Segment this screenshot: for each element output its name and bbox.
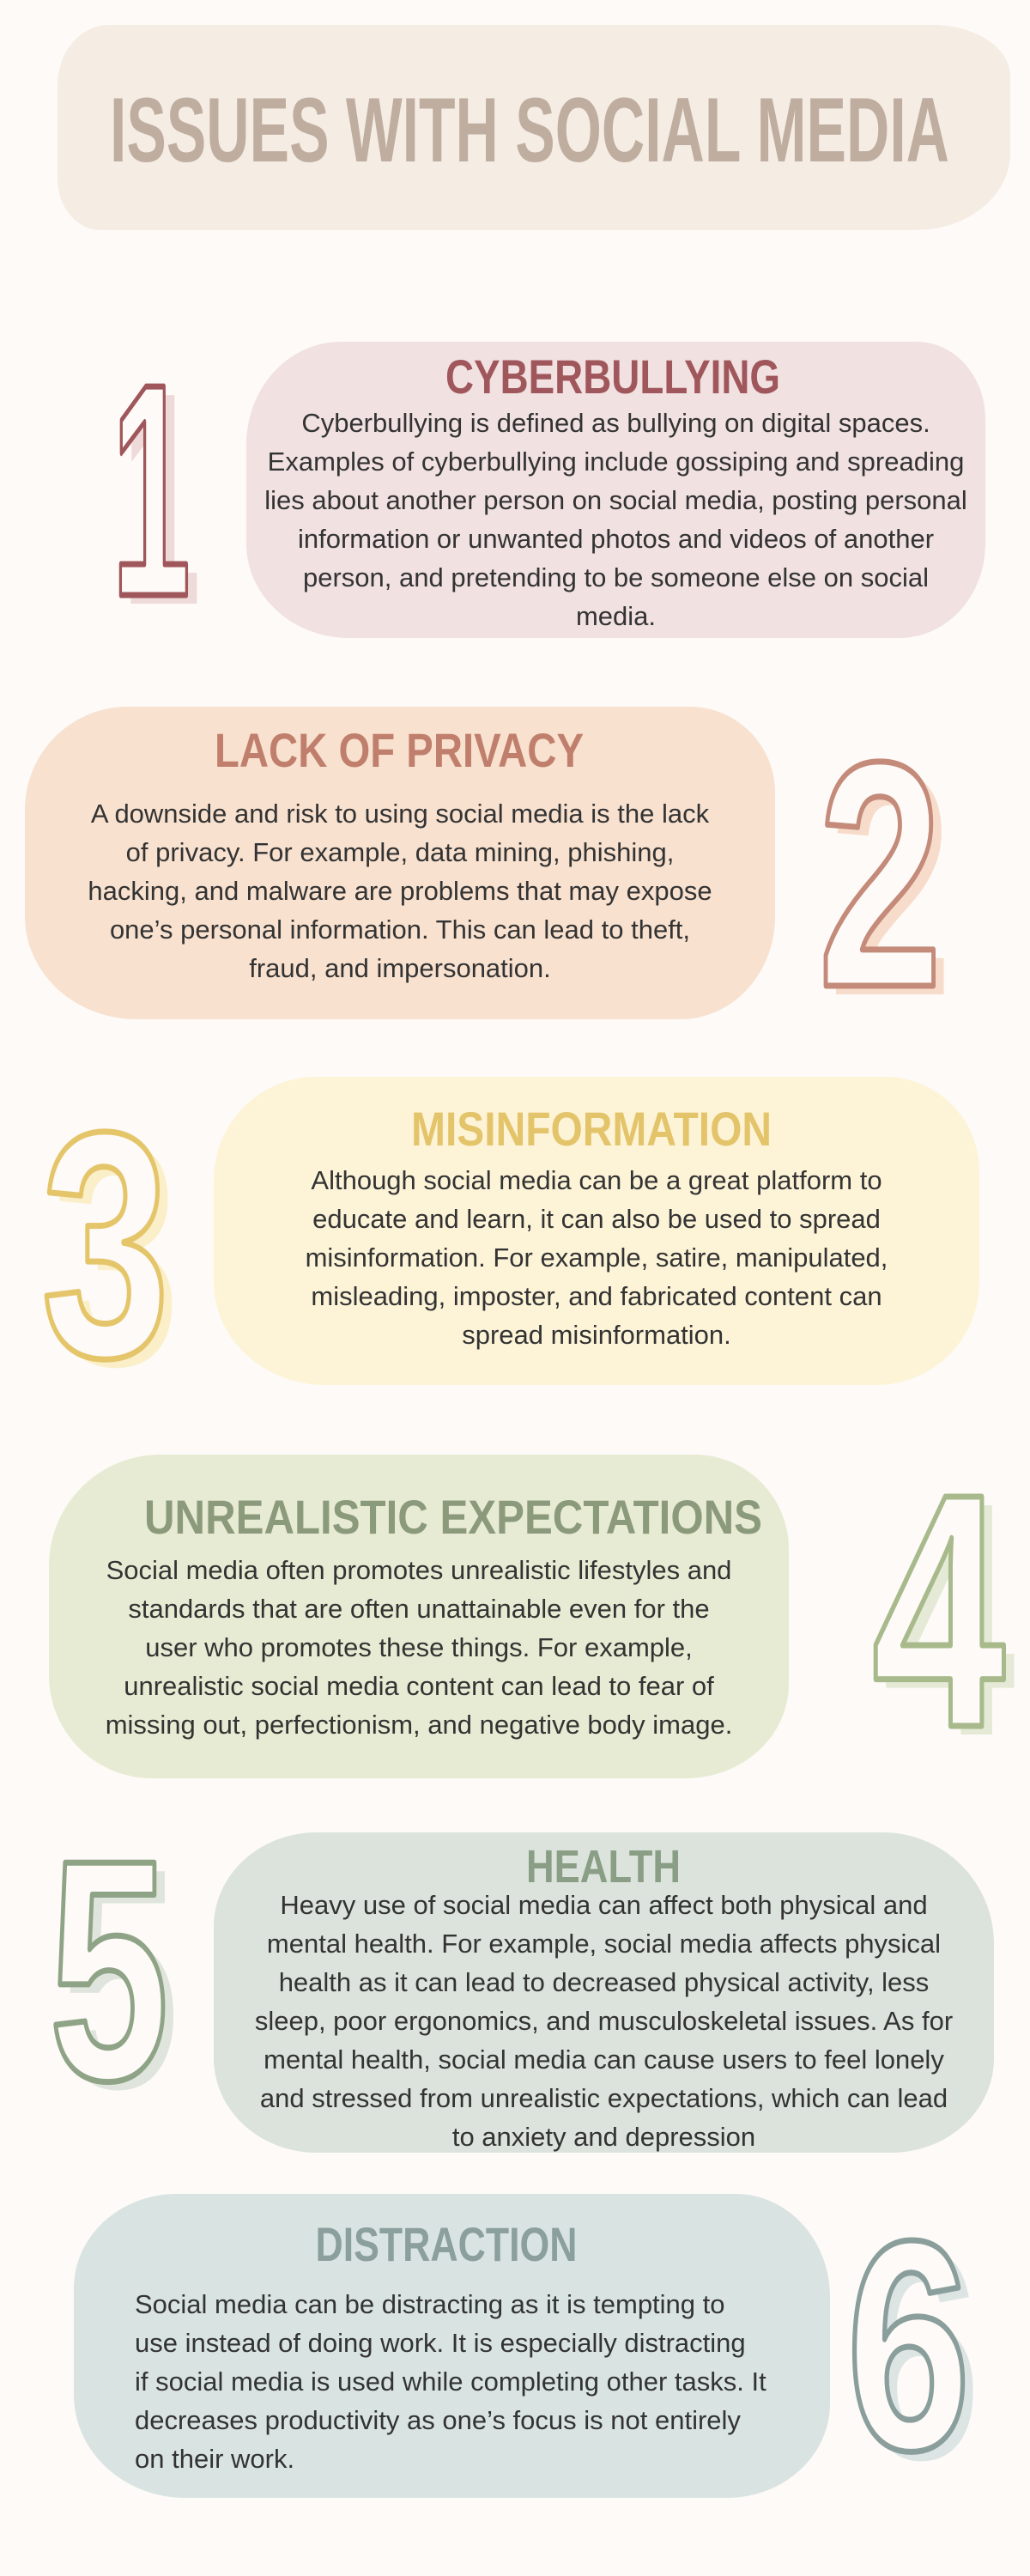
heading: health: HEALTH <box>526 1841 681 1893</box>
text: distraction: use instead of doing work. It is especially distracting <box>135 2328 746 2358</box>
text: cyberbullying: Examples of cyberbullying include gossiping and spreading <box>268 447 964 477</box>
text: lack of privacy: one’s personal information. This can lead to theft, <box>110 914 690 945</box>
heading: distraction: DISTRACTION <box>316 2217 577 2271</box>
text: distraction <box>135 2289 766 2474</box>
text: distraction: decreases productivity as one’s focus is not entirely <box>135 2405 741 2435</box>
text: health: health as it can lead to decreased physical activity, less <box>279 1967 929 1997</box>
text: health: and stressed from unrealistic expectations, which can lead <box>260 2083 948 2113</box>
text: health: mental health, social media can cause users to feel lonely <box>264 2044 944 2075</box>
text: misinformation <box>306 1165 888 1350</box>
text: misinformation: Although social media can be a great platform to <box>311 1165 882 1195</box>
text: cyberbullying: person, and pretending to be someone else on social <box>303 562 929 592</box>
text: lack of privacy: hacking, and malware are problems that may expose <box>88 876 712 906</box>
text: distraction: if social media is used while completing other tasks. It <box>135 2366 766 2397</box>
heading: cyberbullying: CYBERBULLYING <box>445 349 780 404</box>
text: cyberbullying: lies about another person on social media, posting personal <box>264 485 967 515</box>
panel: health <box>214 1832 994 2153</box>
text: misinformation: misinformation. For example, satire, manipulated, <box>306 1242 888 1273</box>
heading: lack of privacy: LACK OF PRIVACY <box>215 723 584 777</box>
text: lack of privacy: fraud, and impersonation. <box>249 953 551 983</box>
panel: lack of privacy <box>25 707 775 1019</box>
text: cyberbullying: information or unwanted photos and videos of another <box>298 524 934 554</box>
text: health: sleep, poor ergonomics, and musculoskeletal issues. As for <box>255 2006 953 2036</box>
text: cyberbullying: Cyberbullying is defined as bullying on digital spaces. <box>301 408 930 438</box>
text: health: Heavy use of social media can affect both physical and <box>280 1890 928 1920</box>
text: unrealistic expectations: Social media often promotes unrealistic lifestyles and <box>106 1555 731 1585</box>
text: unrealistic expectations: unrealistic social media content can lead to fear of <box>124 1671 714 1701</box>
text: unrealistic expectations: user who promotes these things. For example, <box>145 1632 693 1662</box>
text: lack of privacy: of privacy. For example, data mining, phishing, <box>126 837 674 867</box>
text: distraction: Social media can be distracting as it is tempting to <box>135 2289 725 2319</box>
panel: unrealistic expectations <box>49 1455 789 1778</box>
text: unrealistic expectations: standards that are often unattainable even for the <box>128 1594 710 1624</box>
title banner <box>58 25 1010 230</box>
text: unrealistic expectations: missing out, perfectionism, and negative body image. <box>106 1710 732 1740</box>
text: health: mental health. For example, social media affects physical <box>267 1929 941 1959</box>
text: distraction: on their work. <box>135 2444 294 2474</box>
text: misinformation: spread misinformation. <box>462 1320 731 1350</box>
text: misinformation: educate and learn, it can also be used to spread <box>312 1204 881 1234</box>
panel: cyberbullying <box>246 342 985 638</box>
text: cyberbullying <box>264 408 967 631</box>
text: misinformation: misleading, imposter, and fabricated content can <box>311 1281 882 1311</box>
text: cyberbullying: media. <box>576 601 656 631</box>
panel: misinformation <box>214 1077 979 1385</box>
panel: distraction <box>74 2194 830 2498</box>
text: health <box>255 1890 953 2152</box>
text: health: to anxiety and depression <box>452 2122 755 2152</box>
text: unrealistic expectations <box>106 1555 732 1740</box>
text: lack of privacy <box>88 799 712 983</box>
text: lack of privacy: A downside and risk to using social media is the lack <box>91 799 709 829</box>
